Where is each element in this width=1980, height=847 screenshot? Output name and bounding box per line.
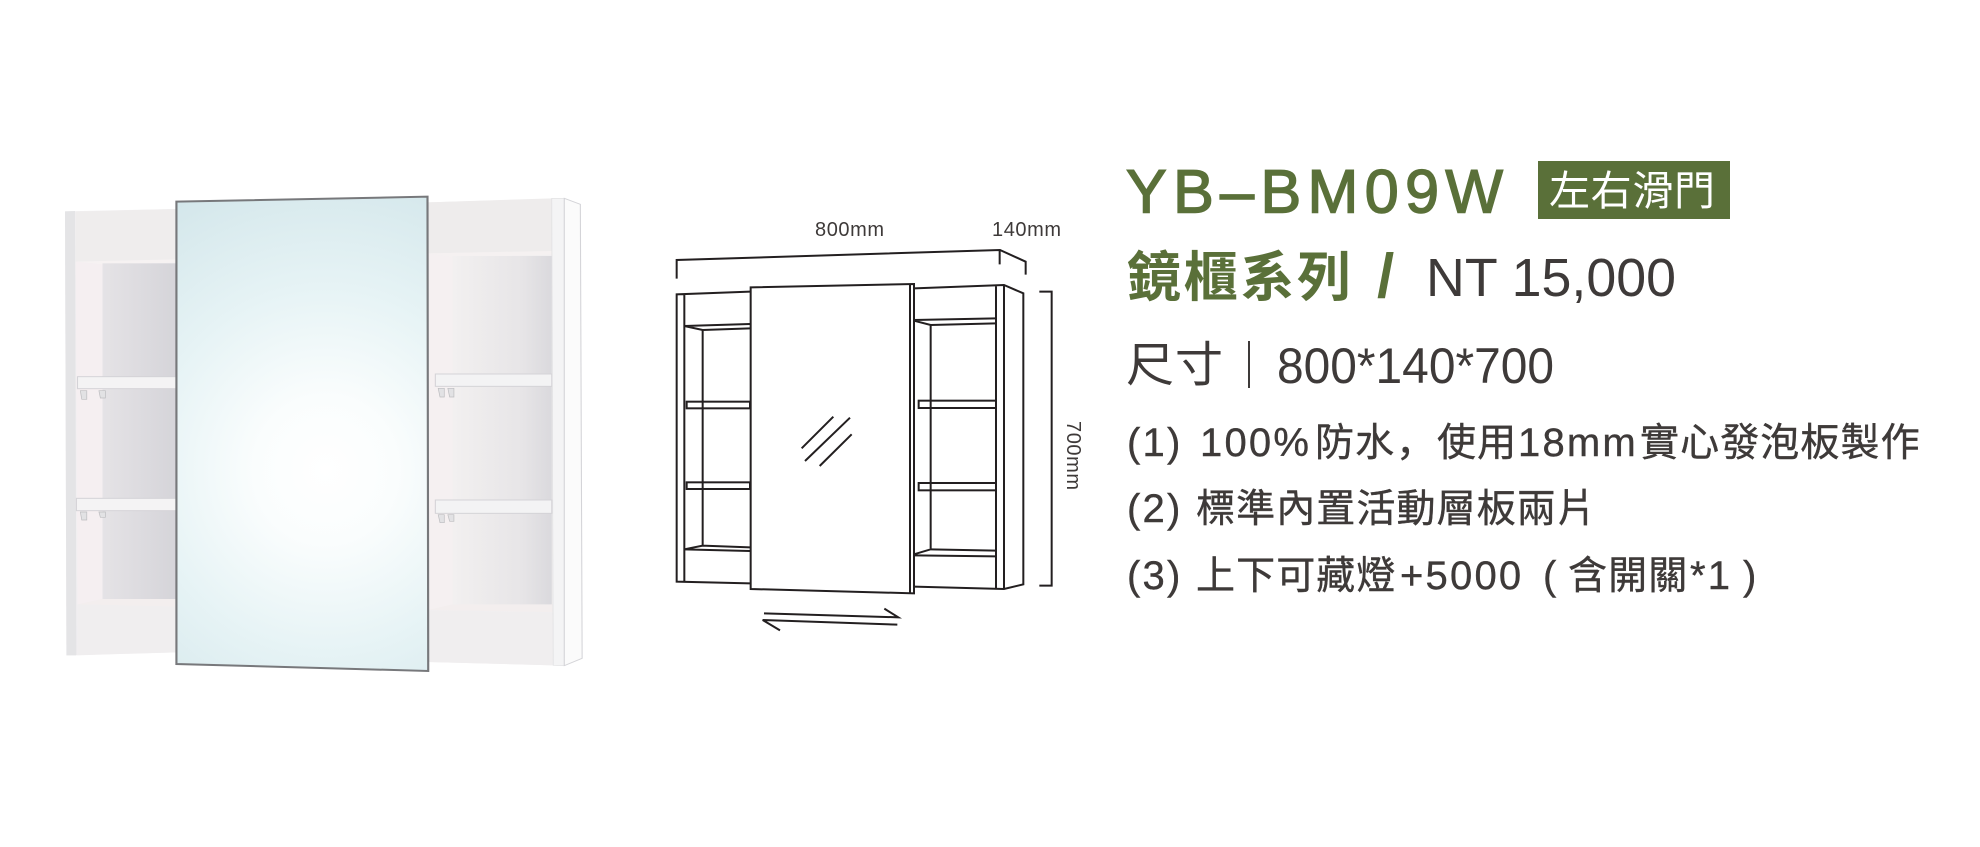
feature 1: 100% xyxy=(1200,421,1311,465)
arrows: sliding direction xyxy=(763,609,898,630)
heading: series and price: NT 15,000 xyxy=(1426,248,1676,308)
feature 1: ， xyxy=(1396,422,1436,465)
mirror door xyxy=(176,197,428,671)
right cabinet section xyxy=(427,198,582,666)
feature 3: ( xyxy=(1543,554,1559,598)
feature 2: (2) xyxy=(1127,487,1182,531)
feature 3: ) xyxy=(1743,554,1759,598)
feature 1: 18mm xyxy=(1518,421,1638,465)
width and depth dimension lines xyxy=(677,250,1026,279)
heading: series and price xyxy=(1127,242,1676,311)
mirror hatch marks xyxy=(802,417,852,466)
label: 800mm: 800mm xyxy=(815,219,884,241)
height dimension line xyxy=(1039,292,1052,586)
feature 1: (1) xyxy=(1127,421,1182,465)
badge: left-right sliding door xyxy=(1538,161,1730,219)
title: model number: YB–BM09W xyxy=(1126,158,1503,226)
feature 1: 使用 xyxy=(1437,422,1517,465)
heading: series and price: / xyxy=(1377,242,1394,311)
feature list xyxy=(1127,421,1921,598)
feature 1: 防水 xyxy=(1315,422,1395,465)
feature 2: 標準內置活動層板兩片 xyxy=(1196,488,1597,531)
feature 3: (3) xyxy=(1127,554,1182,598)
feature 3: +5000 xyxy=(1400,554,1523,598)
line drawing with dimensions xyxy=(677,219,1084,630)
product photo: sliding mirror cabinet xyxy=(65,197,582,671)
dimensions line: 800*140*700 xyxy=(1277,338,1554,394)
label: 140mm: 140mm xyxy=(992,219,1061,241)
dimensions line: 尺寸 xyxy=(1126,339,1223,392)
label: 700mm: 700mm xyxy=(1062,421,1084,490)
heading: series and price: 鏡櫃系列 xyxy=(1127,248,1351,308)
feature 1: 實心發泡板製作 xyxy=(1640,422,1921,465)
dimensions line xyxy=(1126,338,1554,394)
badge: left-right sliding door: 左右滑門 xyxy=(1549,168,1715,214)
feature 3: *1 xyxy=(1690,554,1732,598)
feature 3: 含開關 xyxy=(1568,555,1688,598)
cabinet outline xyxy=(677,284,1023,593)
feature 3: 上下可藏燈 xyxy=(1196,555,1397,598)
left cabinet section xyxy=(65,209,176,655)
